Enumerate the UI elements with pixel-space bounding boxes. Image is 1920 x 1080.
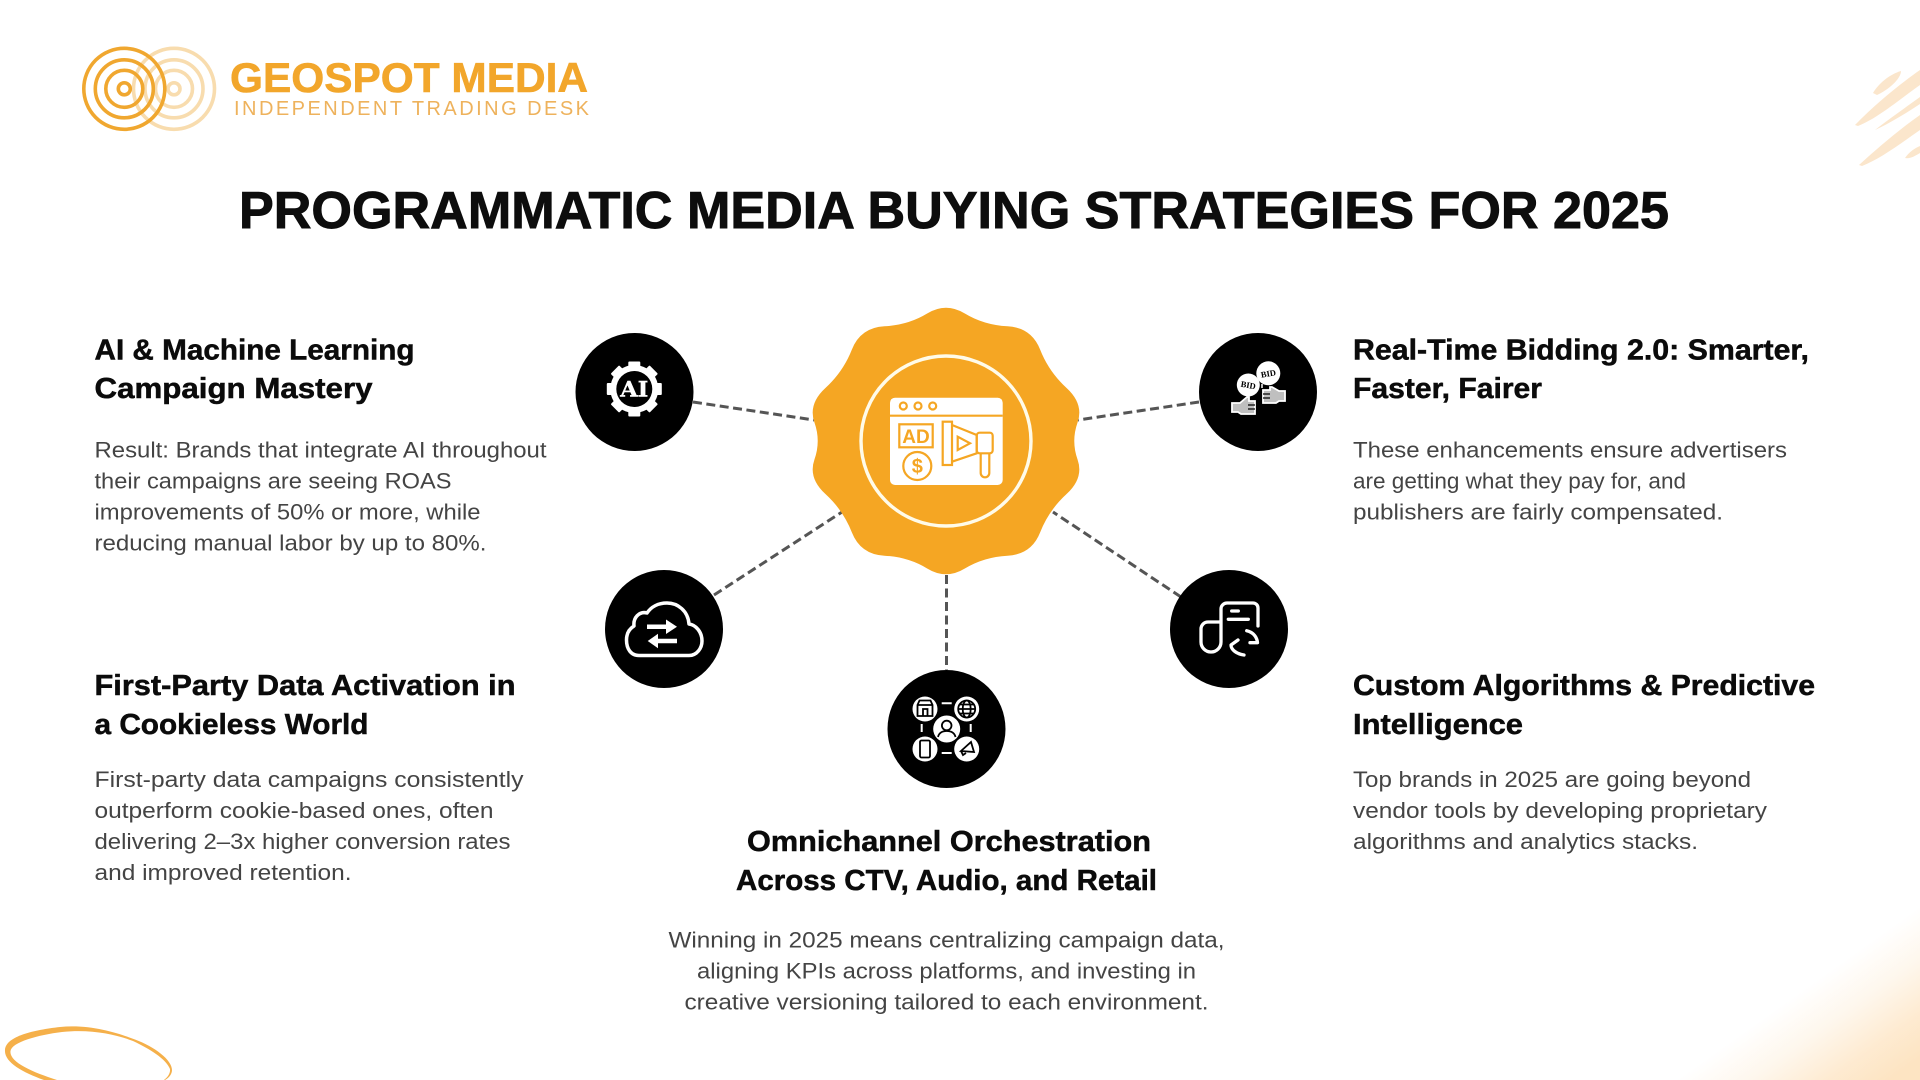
body text (668, 928, 1224, 1014)
body text: Top brands in 2025 are going beyond (1353, 767, 1751, 792)
panel: AI and machine learning (94, 334, 547, 556)
icon: ad window with megaphone: $ (912, 456, 923, 478)
body text: algorithms and analytics stacks. (1353, 829, 1698, 854)
body text: vendor tools by developing proprietary (1353, 798, 1768, 823)
heading: Omnichannel Orchestration (747, 826, 1151, 858)
heading (94, 334, 414, 405)
body text: Result: Brands that integrate AI throughout (94, 438, 547, 462)
heading: Campaign Mastery (94, 373, 372, 405)
logo wordmark: GEOSPOT MEDIA (230, 54, 588, 101)
heading: Real-Time Bidding 2.0: Smarter, (1353, 334, 1809, 366)
body text: reducing manual labor by up to 80%. (94, 530, 486, 556)
heading: Across CTV, Audio, and Retail (736, 865, 1157, 897)
body text: creative versioning tailored to each environment. (684, 990, 1208, 1014)
body text (1353, 438, 1787, 524)
node: BID paddles (1199, 333, 1317, 451)
body text: their campaigns are seeing ROAS (94, 468, 452, 494)
body text: These enhancements ensure advertisers (1353, 438, 1787, 462)
badge scalloped shape (813, 308, 1079, 574)
decorative brush strokes: top right (1855, 70, 1920, 166)
title: PROGRAMMATIC MEDIA BUYING STRATEGIES FOR 2025 (239, 182, 1669, 240)
icon: ad window with megaphone (890, 398, 1003, 485)
heading: a Cookieless World (94, 709, 368, 741)
body text: delivering 2–3x higher conversion rates (94, 829, 510, 854)
node: AI gear (576, 333, 694, 451)
heading (1353, 334, 1809, 405)
heading: Custom Algorithms & Predictive (1353, 670, 1815, 702)
logo mark: concentric rings (84, 48, 214, 129)
badge inner ring (861, 356, 1031, 526)
node: omnichannel (888, 670, 1006, 788)
icon: algorithm document (1201, 603, 1258, 655)
icon: ad window with megaphone: AD (902, 427, 930, 448)
icon: bid balloons and fists: BID (1260, 367, 1277, 380)
heading: First-Party Data Activation in (94, 670, 516, 702)
heading (736, 826, 1157, 897)
body text (94, 438, 547, 556)
body text (1353, 767, 1768, 854)
body text: and improved retention. (94, 860, 352, 885)
heading: Faster, Fairer (1353, 373, 1542, 405)
node: document analytics (1170, 570, 1288, 688)
heading: AI & Machine Learning (94, 334, 414, 366)
body text: Winning in 2025 means centralizing campaign data, (668, 928, 1224, 952)
logo (84, 48, 590, 129)
icon: bid balloons and fists (1232, 361, 1285, 414)
body text: outperform cookie-based ones, often (94, 798, 494, 823)
icon: bid balloons and fists: BID (1240, 379, 1257, 391)
corner glow: bottom right (1670, 890, 1920, 1080)
panel: real-time bidding (1353, 334, 1809, 524)
central badge (813, 308, 1079, 574)
icon: AI gear: AI (619, 376, 648, 402)
node: cloud transfer (605, 570, 723, 688)
body text: aligning KPIs across platforms, and investing in (697, 958, 1196, 984)
body text (94, 767, 524, 885)
body text: improvements of 50% or more, while (94, 500, 480, 524)
body text: publishers are fairly compensated. (1353, 500, 1723, 524)
panel: custom algorithms (1353, 670, 1815, 854)
icon: channel network (912, 696, 979, 762)
connector lines (693, 402, 1199, 670)
heading (94, 670, 516, 741)
heading (1353, 670, 1815, 741)
panel: first-party data (94, 670, 524, 885)
panel: omnichannel orchestration (668, 826, 1224, 1014)
logo tagline: INDEPENDENT TRADING DESK (234, 98, 590, 120)
body text: First-party data campaigns consistently (94, 767, 524, 792)
decorative brush ellipse: bottom left (5, 1026, 172, 1080)
heading: Intelligence (1353, 709, 1523, 741)
body text: are getting what they pay for, and (1353, 468, 1686, 494)
icon: cloud with exchange arrows (626, 603, 702, 656)
